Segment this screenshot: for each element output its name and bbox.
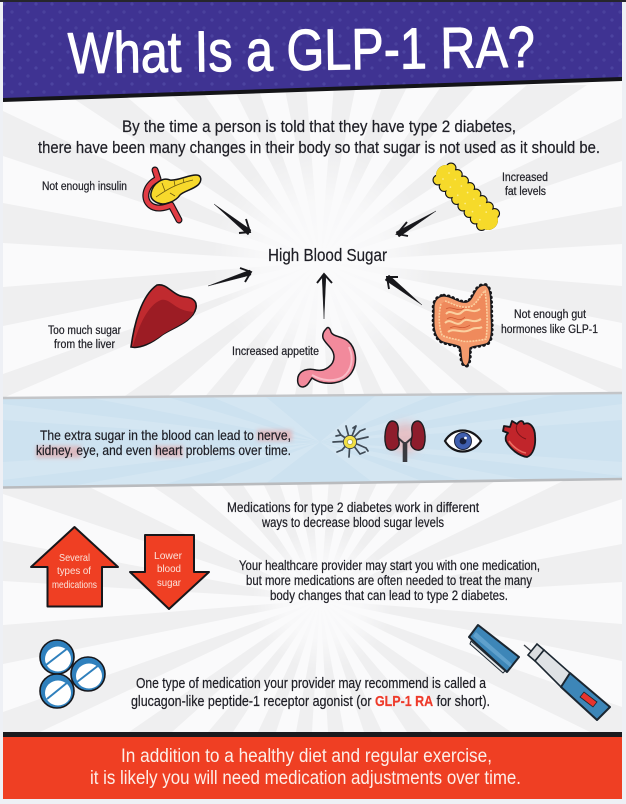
- panel: title banner: [0, 0, 626, 102]
- footer text: [90, 746, 521, 789]
- label: increased appetite: Increased appetite: [232, 346, 319, 358]
- complications text: The extra sugar in the blood can lead to nerve,: [40, 427, 291, 443]
- arrow: stomach to high blood sugar: [317, 274, 332, 319]
- label: not enough gut hormones: [501, 309, 598, 336]
- medication text: GLP-1 RA: [131, 676, 490, 710]
- icon: intestine: [434, 285, 491, 366]
- arrow: fat to high blood sugar: [396, 211, 436, 237]
- medication text: GLP-1 RA: glucagon-like peptide-1 receptor agonist (or GLP-1 RA for short).: [131, 694, 490, 710]
- label: not enough gut hormones: hormones like GLP-1: [501, 324, 598, 336]
- label: too much sugar from the liver: Too much sugar: [48, 325, 121, 337]
- medication text: provider: [239, 558, 540, 603]
- label: too much sugar from the liver: [48, 325, 121, 351]
- icon: stomach: [298, 328, 355, 387]
- footer text: it is likely you will need medication adjustments over time.: [90, 768, 521, 789]
- arrow: several types of medications: [31, 527, 118, 606]
- arrow: pancreas to high blood sugar: [214, 204, 251, 235]
- icon: fat: [438, 168, 495, 226]
- label: too much sugar from the liver: from the liver: [54, 339, 115, 351]
- medication text: intro: ways to decrease blood sugar levels: [261, 515, 444, 530]
- arrow: liver to high blood sugar: [208, 268, 251, 286]
- pen cap: [469, 625, 519, 673]
- panel: blue complications band background: [3, 392, 622, 488]
- medication text: provider: body changes that can lead to type 2 diabetes.: [270, 588, 508, 603]
- icon: kidneys: [385, 421, 425, 462]
- medication text: GLP-1 RA: One type of medication your provider may recommend is called a: [136, 676, 487, 692]
- panel: causes of high blood sugar background: [3, 78, 622, 400]
- footer text: In addition to a healthy diet and regular exercise,: [121, 746, 492, 767]
- footer banner: [3, 732, 622, 799]
- icon: nerve cell: [333, 426, 368, 457]
- arrow: lower blood sugar: [130, 535, 209, 609]
- arrow: lower blood sugar: sugar: [157, 577, 181, 589]
- icon: heart: [503, 421, 535, 457]
- icon: eye: [445, 430, 481, 452]
- intro text: [38, 118, 600, 157]
- medication text: intro: Medications for type 2 diabetes work in different: [227, 500, 479, 515]
- icon: pills: [40, 640, 105, 708]
- label: not enough gut hormones: Not enough gut: [514, 309, 587, 321]
- label: not enough insulin: Not enough insulin: [42, 181, 127, 193]
- label: increased fat levels: Increased: [502, 172, 548, 184]
- arrow: several types of medications: Several: [59, 552, 90, 564]
- panel: medications background: [3, 479, 622, 733]
- medication text: provider: Your healthcare provider may start you with one medication,: [239, 558, 540, 573]
- complications text: [36, 427, 292, 458]
- complications text: kidney, eye, and even heart problems over time.: [36, 442, 291, 458]
- icon: liver: [131, 285, 196, 347]
- label: increased fat levels: fat levels: [505, 186, 546, 198]
- arrow: lower blood sugar: blood: [157, 563, 181, 575]
- intro text: By the time a person is told that they have type 2 diabetes,: [122, 118, 516, 136]
- pen body: [524, 644, 610, 720]
- heading: high blood sugar: High Blood Sugar: [268, 245, 387, 265]
- arrow: several types of medications: types of: [57, 565, 91, 577]
- arrow: lower blood sugar: Lower: [154, 550, 182, 562]
- arrow: several types of medications: medications: [52, 579, 97, 591]
- label: increased fat levels: [502, 172, 548, 198]
- medication text: provider: but more medications are often needed to treat the many: [246, 573, 532, 588]
- medication text: intro: [227, 500, 479, 530]
- title: What Is a GLP-1 RA?: [67, 15, 535, 86]
- icon: pancreas: [146, 170, 201, 220]
- arrow: gut to high blood sugar: [385, 275, 422, 305]
- icon: injection pen: [469, 625, 610, 720]
